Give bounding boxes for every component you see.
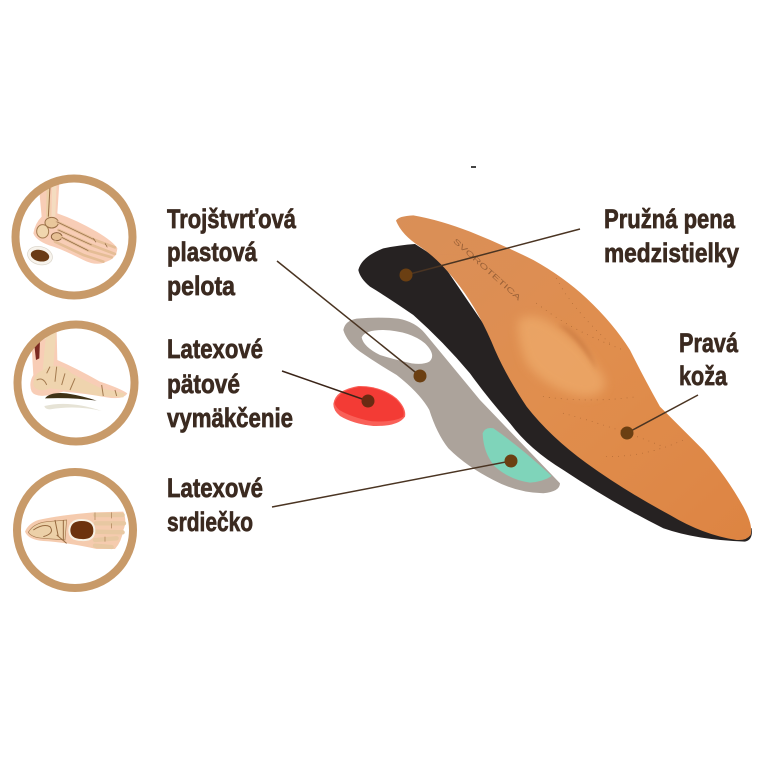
label: genuine leather: koža: [679, 361, 728, 391]
callout: metatarsal pad: [272, 454, 518, 507]
callout: plastic pelota: [277, 261, 426, 382]
label: three-quarter plastic pelota: pelota: [167, 271, 236, 301]
insole exploded view: [333, 215, 752, 542]
perforation dots: [537, 278, 683, 457]
label: three-quarter plastic pelota: plastová: [167, 237, 258, 267]
mint latex pad: [483, 428, 552, 483]
label: elastic foam: Pružná pena: [604, 204, 736, 234]
callout: elastic foam: [400, 229, 580, 282]
black foam layer: [358, 244, 752, 542]
brand imprint: SVOROTETICA: [451, 236, 523, 302]
label: latex heel cushion: [167, 334, 293, 433]
arch highlight: [518, 316, 605, 397]
label: latex metatarsal pad: srdiečko: [167, 507, 253, 537]
label: latex heel cushion: vymäkčenie: [167, 403, 293, 433]
grey plastic pelota: [343, 318, 560, 493]
callout: heel cushion: [282, 371, 374, 408]
icon: foot on insole, side view: [18, 324, 134, 442]
label: genuine leather: [679, 328, 739, 391]
icon: foot with heel pad, side view: [16, 178, 132, 296]
label: elastic foam: [604, 204, 739, 268]
label: elastic foam: medzistielky: [604, 238, 739, 268]
label: genuine leather: Pravá: [679, 328, 739, 358]
callout: leather: [620, 395, 698, 440]
orange leather top: [396, 215, 751, 540]
icon: foot with metatarsal pad, top view: [17, 472, 133, 588]
label: three-quarter plastic pelota: Trojštvrťová: [167, 204, 297, 234]
label: latex heel cushion: pätové: [167, 369, 240, 399]
label: latex metatarsal pad: Latexové: [167, 473, 263, 503]
red latex cushion: [333, 386, 405, 426]
label: latex heel cushion: Latexové: [167, 334, 263, 364]
label: latex metatarsal pad: [167, 473, 263, 537]
label: three-quarter plastic pelota: [167, 204, 297, 301]
speck: [471, 166, 476, 168]
